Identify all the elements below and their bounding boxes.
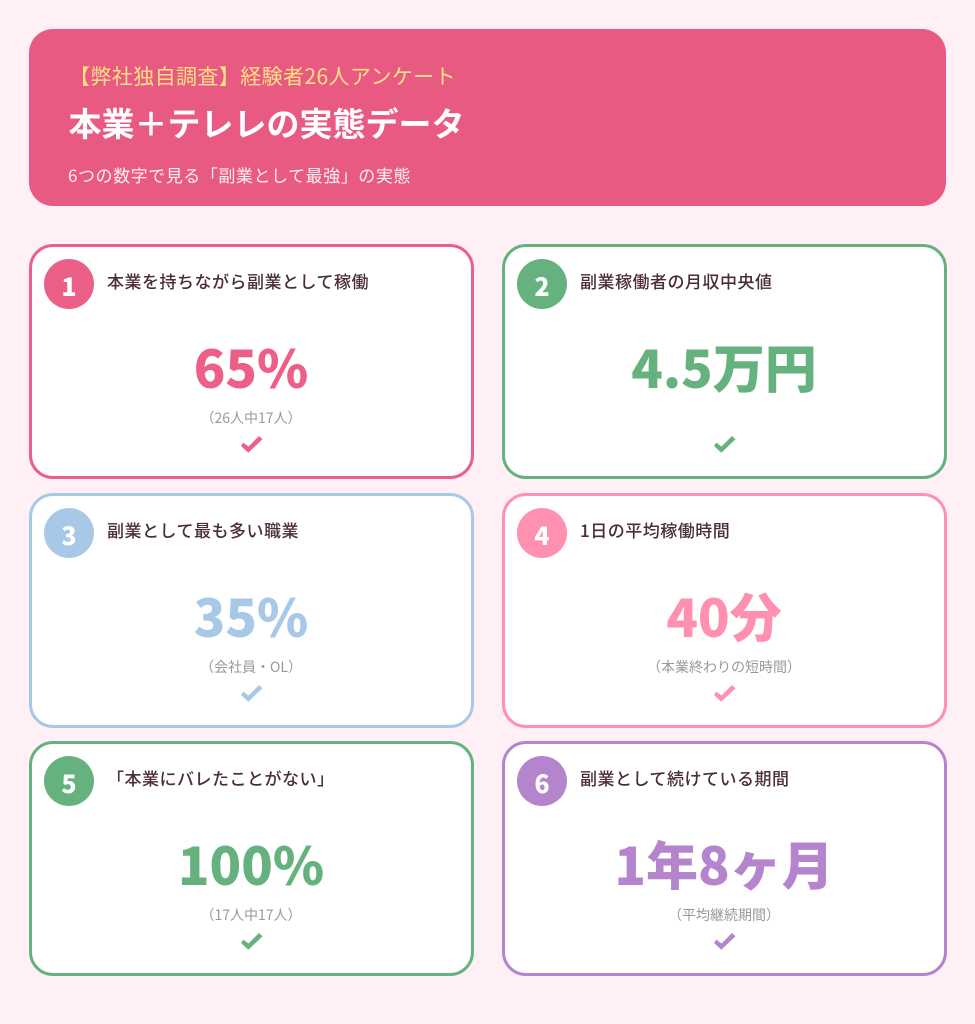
number badge 2: 2	[534, 268, 550, 304]
card 3 note: （会社員・OL）	[200, 657, 302, 677]
number badge 4	[517, 508, 567, 558]
icon: check 5	[241, 933, 262, 950]
panel: card 3	[29, 493, 474, 728]
number badge 1	[44, 259, 94, 309]
number badge 4: 4	[534, 517, 550, 553]
panel: card 1	[29, 244, 474, 478]
card 1 note: （26人中17人）	[200, 408, 302, 428]
icon: check 4	[714, 685, 736, 702]
number badge 3: 3	[61, 517, 77, 553]
number badge 6	[517, 756, 567, 806]
card 1 heading: 本業を持ちながら副業として稼働	[107, 268, 369, 293]
card 5 value: 100%	[178, 825, 324, 900]
panel: card 5	[29, 741, 474, 976]
icon: check 6	[714, 933, 736, 950]
card 1 value: 65%	[194, 328, 308, 403]
card 3 heading: 副業として最も多い職業	[107, 517, 299, 542]
card 2 value: 4.5万円	[631, 328, 817, 403]
card 4 note: （本業終わりの短時間）	[647, 657, 801, 677]
card 2 heading: 副業稼働者の月収中央値	[580, 268, 772, 293]
number badge 5: 5	[61, 765, 77, 801]
panel: card 4	[502, 493, 946, 728]
card 3 value: 35%	[194, 577, 308, 652]
header eyebrow: 【弊社独自調査】経験者26人アンケート	[69, 61, 456, 91]
icon: check 1	[241, 436, 262, 453]
card 6 note: （平均継続期間）	[668, 905, 780, 925]
number badge 1: 1	[61, 268, 77, 304]
card 4 value: 40分	[666, 577, 782, 652]
card 4 heading: 1日の平均稼働時間	[580, 517, 730, 542]
header subtitle: 6つの数字で見る「副業として最強」の実態	[68, 162, 411, 187]
main title: 本業＋テレレの実態データ	[68, 98, 464, 146]
panel: card 2	[502, 244, 946, 478]
card 6 heading: 副業として続けている期間	[580, 765, 790, 790]
number badge 3	[44, 508, 94, 558]
panel: card 6	[502, 741, 946, 976]
icon: check 2	[714, 436, 736, 453]
card 6 value: 1年8ヶ月	[614, 825, 834, 900]
icon: check 3	[241, 685, 262, 702]
number badge 6: 6	[534, 765, 550, 801]
card 5 heading: 「本業にバレたことがない」	[107, 765, 334, 790]
number badge 2	[517, 259, 567, 309]
header banner	[29, 29, 946, 206]
card 5 note: （17人中17人）	[200, 905, 302, 925]
number badge 5	[44, 756, 94, 806]
